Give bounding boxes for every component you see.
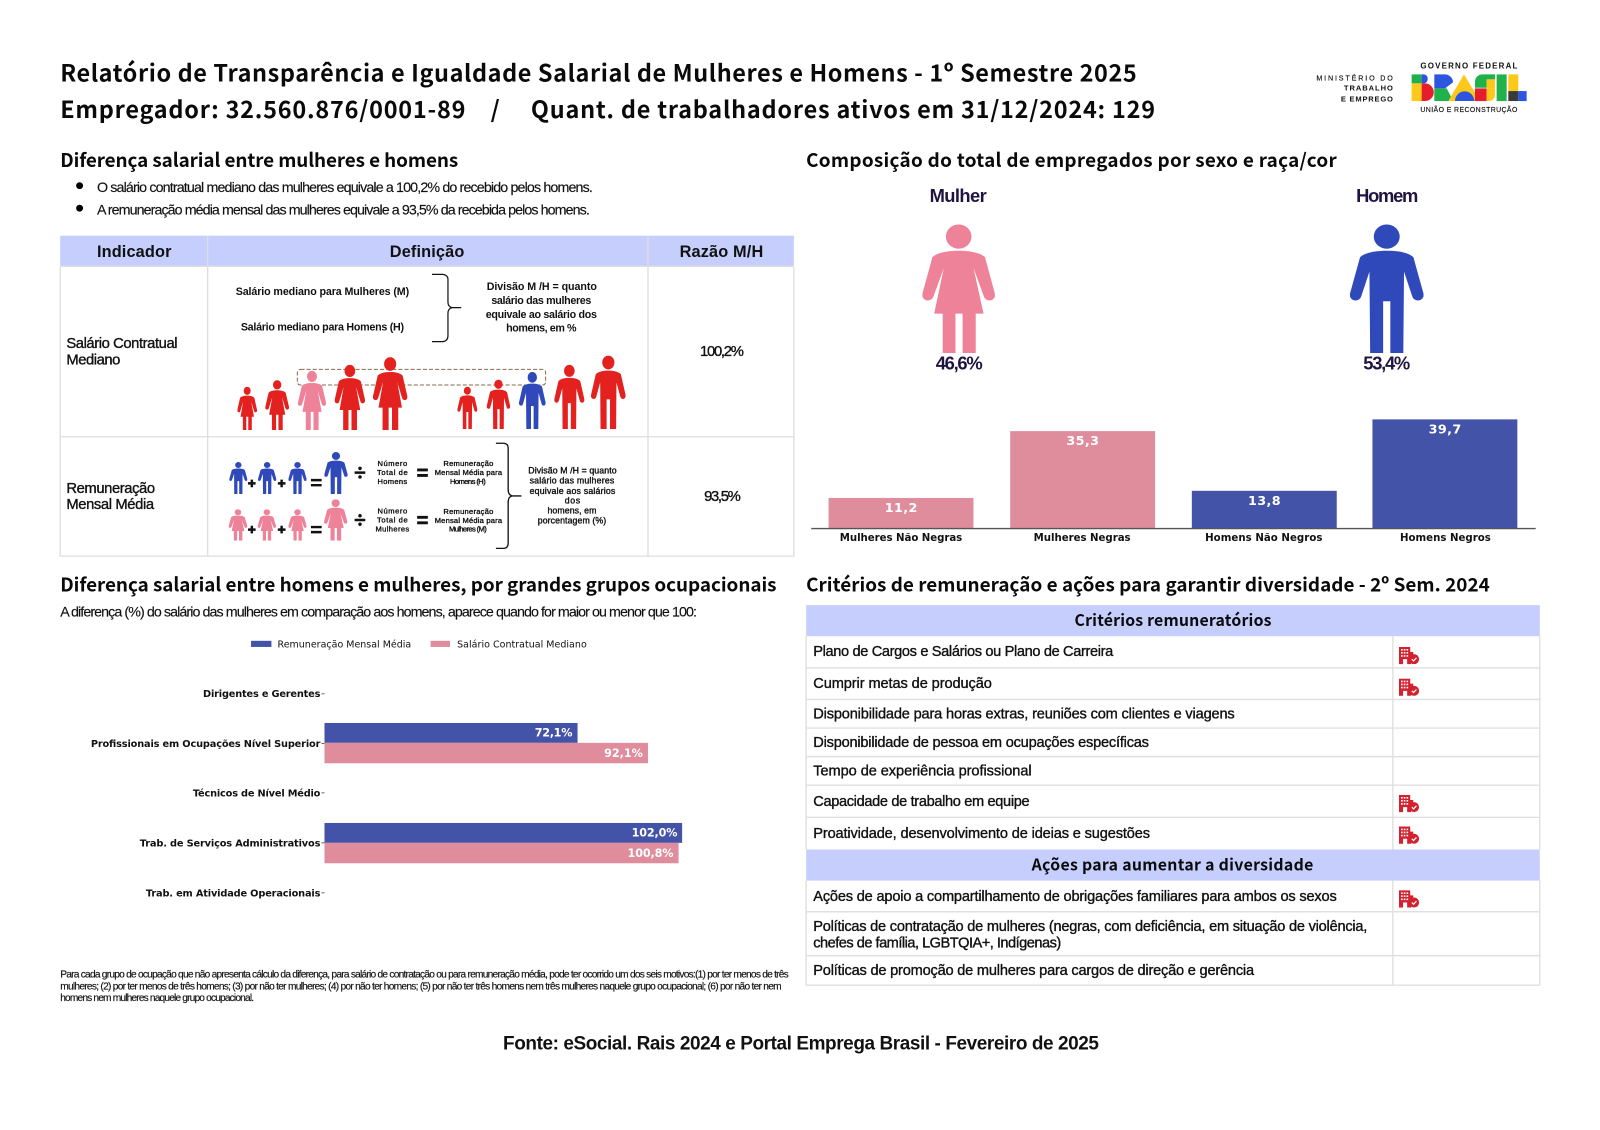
bar chart: grupos ocupacionais: Dirigentes e Gerentes	[203, 689, 321, 700]
figure: homem 53,4%: 53,4%	[1363, 352, 1410, 373]
bar chart: grupos ocupacionais: Trab. de Serviços Administrativos	[140, 838, 321, 849]
table: critérios e ações: Cumprir metas de produção	[813, 676, 992, 692]
table: critérios e ações: Disponibilidade para horas extras, reuniões com clientes e viagens	[813, 706, 1235, 722]
bar chart: grupos ocupacionais: Trab. em Atividade Operacionais	[146, 888, 321, 899]
row: salário contratual mediano: 100,2%	[700, 344, 744, 360]
title: Empregador: 32.560.876/0001-89 / Quant. de trabalhadores ativos em 31/12/2024: 129	[60, 91, 1155, 125]
heading: critérios: Critérios de remuneração e ações para garantir diversidade - 2º Sem. 2024	[806, 570, 1490, 597]
icons: empresa com critério	[1399, 647, 1419, 908]
bullet list: A remuneração média mensal das mulheres equivale a 93,5% da recebida pelos homens.	[97, 202, 590, 218]
bar chart: raça/cor: Mulheres Não Negras	[840, 533, 962, 544]
logo: ministério e governo federal: TRABALHO	[1344, 83, 1393, 92]
bar chart: grupos ocupacionais: 92,1%	[604, 747, 643, 760]
figure: homem 53,4%: Homem	[1356, 185, 1418, 206]
table: critérios e ações: Políticas de contratação de mulheres (negras, com deficiência, em situação de violência,	[813, 919, 1367, 935]
bar chart: grupos ocupacionais: 102,0%	[632, 827, 678, 840]
definition: divisão M/H: dos	[565, 495, 581, 505]
definition: salário mediano: salário das mulheres	[491, 295, 591, 307]
pictogram: cálculo mulheres	[229, 499, 503, 541]
bar chart: grupos ocupacionais: Técnicos de Nível Médio	[193, 787, 321, 799]
legend: Remuneração Mensal Média	[278, 639, 411, 650]
row: remuneração mensal média: Mensal Média	[66, 497, 155, 513]
figure: homem 53,4%	[1350, 185, 1424, 373]
subtitle: A diferença (%) do salário das mulheres em comparação aos homens, aparece quando for maior ou menor que 100:	[60, 604, 697, 620]
row: salário contratual mediano: Mediano	[66, 352, 120, 368]
definition: divisão M/H	[496, 443, 617, 548]
definition: salário mediano: homens, em %	[506, 323, 577, 335]
table: critérios e ações	[806, 605, 1540, 985]
row: salário contratual mediano	[66, 274, 744, 430]
footnote: mulheres; (2) por ter menos de três homens; (3) por não ter mulheres; (4) por não ter homens; (5) por não ter três homens nem três mulheres naquele grupo ocupacional; (6) por não ter nem	[60, 981, 782, 992]
figure: mulher 46,6%	[922, 185, 995, 373]
panel: critérios de remuneração e ações	[806, 570, 1540, 985]
footnote	[60, 970, 789, 1004]
row: remuneração mensal média: 93,5%	[704, 489, 741, 505]
bar chart: raça/cor: 39,7	[1429, 423, 1461, 438]
bullet list: O salário contratual mediano das mulheres equivale a 100,2% do recebido pelos homens.	[97, 180, 593, 196]
bar chart: grupos ocupacionais: 72,1%	[535, 727, 572, 740]
table: critérios e ações: Disponibilidade de pessoa em ocupações específicas	[813, 735, 1149, 751]
pictogram: cálculo mulheres: Total de	[377, 515, 408, 524]
bar chart: grupos ocupacionais	[91, 689, 682, 899]
pictogram: cálculo homens: Mensal Média para	[435, 468, 503, 477]
panel: composição por sexo e raça/cor	[806, 146, 1536, 544]
row: remuneração mensal média: Remuneração	[66, 481, 155, 497]
pictogram: cálculo mulheres: Remuneração	[443, 507, 493, 516]
bar chart: raça/cor: 11,2	[885, 501, 917, 516]
table: critérios e ações: Políticas de promoção de mulheres para cargos de direção e gerência	[813, 963, 1255, 979]
legend: Salário Contratual Mediano	[457, 639, 587, 650]
table: indicadores	[60, 236, 794, 556]
heading: diferença salarial: Diferença salarial entre mulheres e homens	[60, 146, 458, 173]
footnote: Para cada grupo de ocupação que não apresenta cálculo da diferença, para salário de contratação ou para remuneração média, pode ter ocorrido um dos seis motivos:(1) por ter menos de três	[60, 970, 789, 981]
pictogram: mediana de mulheres e homens	[237, 356, 626, 430]
heading: grupos ocupacionais: Diferença salarial entre homens e mulheres, por grandes grupos ocupacionais	[60, 570, 777, 597]
pictogram: cálculo homens	[229, 452, 503, 494]
pictogram: cálculo homens: Homens (H)	[450, 477, 486, 486]
table: critérios e ações: Critérios remuneratórios	[1074, 608, 1272, 631]
pictogram: cálculo homens: Remuneração	[443, 459, 493, 468]
title: Relatório de Transparência e Igualdade Salarial de Mulheres e Homens - 1º Semestre 2025	[60, 55, 1137, 89]
bar chart: raça/cor: 35,3	[1066, 434, 1099, 449]
pictogram: cálculo mulheres: Mensal Média para	[435, 516, 503, 525]
definition: salário mediano: Divisão M /H = quanto	[487, 281, 597, 293]
logo: ministério e governo federal: GOVERNO FEDERAL	[1420, 61, 1517, 70]
bullet list	[76, 180, 593, 218]
pictogram: cálculo homens: Número	[378, 459, 407, 468]
logo: ministério e governo federal	[1316, 61, 1527, 114]
table: critérios e ações: chefes de família, LGBTQIA+, Indígenas)	[813, 935, 1061, 951]
bar chart: raça/cor	[811, 419, 1536, 544]
bar chart: raça/cor: Mulheres Negras	[1034, 533, 1131, 544]
figure: mulher 46,6%: Mulher	[930, 185, 987, 206]
definition: salário mediano	[236, 274, 597, 342]
definition: divisão M/H: equivale aos salários	[530, 486, 616, 496]
table: critérios e ações: Tempo de experiência profissional	[813, 764, 1032, 780]
table: indicadores: Indicador	[97, 243, 172, 261]
definition: salário mediano: Salário mediano para Mulheres (M)	[236, 286, 410, 298]
pictogram: cálculo mulheres: Número	[378, 506, 407, 515]
bar chart: raça/cor: 13,8	[1248, 494, 1281, 509]
table: critérios e ações: Ações para aumentar a diversidade	[1031, 852, 1313, 875]
pictogram: cálculo homens: Homens	[378, 477, 407, 486]
logo: ministério e governo federal: MINISTÉRIO DO	[1316, 74, 1393, 83]
bar chart: grupos ocupacionais: 100,8%	[628, 847, 673, 860]
bar chart: grupos ocupacionais: Profissionais em Ocupações Nível Superior	[91, 738, 321, 750]
source footer: Fonte: eSocial. Rais 2024 e Portal Emprega Brasil - Fevereiro de 2025	[503, 1033, 1099, 1054]
legend	[251, 639, 587, 650]
definition: salário mediano: Salário mediano para Homens (H)	[241, 322, 405, 334]
definition: divisão M/H: homens, em	[547, 505, 596, 515]
row: salário contratual mediano: Salário Contratual	[66, 336, 178, 352]
heading: composição: Composição do total de empregados por sexo e raça/cor	[806, 146, 1338, 173]
bar chart: raça/cor: Homens Não Negros	[1205, 533, 1322, 544]
panel: diferença por grandes grupos ocupacionais	[60, 570, 789, 1004]
definition: divisão M/H: porcentagem (%)	[538, 516, 606, 526]
definition: salário mediano: equivale ao salário dos	[486, 309, 597, 321]
logo: ministério e governo federal: E EMPREGO	[1341, 95, 1393, 104]
definition: divisão M/H: Divisão M /H = quanto	[528, 465, 617, 475]
pictogram: cálculo mulheres: Mulheres	[376, 525, 409, 534]
figure: mulher 46,6%: 46,6%	[936, 352, 983, 373]
pictogram: cálculo homens: Total de	[377, 468, 408, 477]
table: critérios e ações: Capacidade de trabalho em equipe	[813, 794, 1030, 810]
footnote: homens nem mulheres naquele grupo ocupacional.	[60, 993, 254, 1004]
table: indicadores: Definição	[390, 243, 464, 261]
row: remuneração mensal média	[66, 443, 741, 548]
title	[60, 55, 1155, 125]
table: indicadores: Razão M/H	[680, 243, 763, 261]
panel: diferença salarial entre mulheres e homens	[60, 146, 794, 556]
bar chart: raça/cor: Homens Negros	[1400, 533, 1491, 544]
table: critérios e ações: Ações de apoio a compartilhamento de obrigações familiares para ambos os sexos	[813, 889, 1337, 905]
pictogram: cálculo mulheres: Mulheres (M)	[449, 525, 487, 534]
table: critérios e ações: Plano de Cargos e Salários ou Plano de Carreira	[813, 644, 1114, 660]
table: critérios e ações: Proatividade, desenvolvimento de ideias e sugestões	[813, 826, 1150, 842]
logo: ministério e governo federal: UNIÃO E RECONSTRUÇÃO	[1420, 105, 1518, 114]
definition: divisão M/H: salário das mulheres	[530, 476, 615, 486]
